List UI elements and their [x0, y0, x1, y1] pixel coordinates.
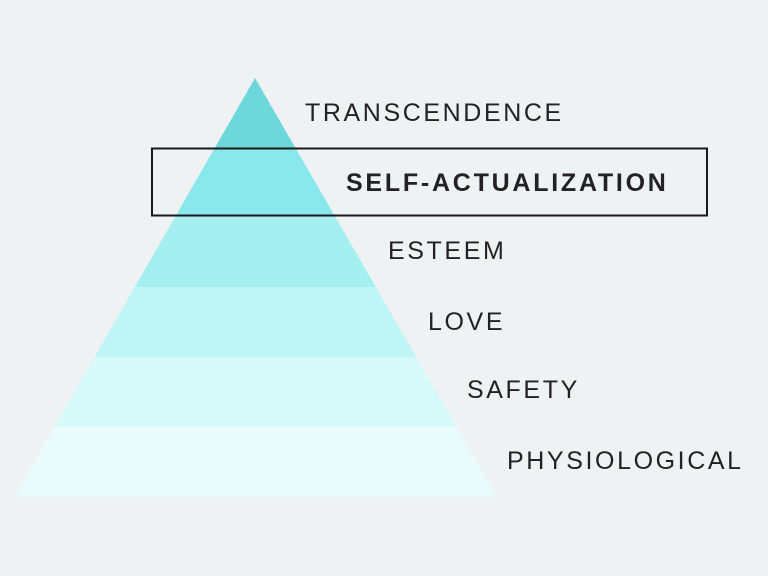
label: esteem: ESTEEM	[388, 237, 506, 265]
band: transcendence	[215, 78, 296, 148]
pyramid	[14, 78, 497, 497]
band: love	[95, 287, 416, 357]
label: love: LOVE	[428, 308, 505, 336]
label: self-actualization: SELF-ACTUALIZATION	[346, 169, 669, 197]
band: self-actualization	[176, 148, 334, 215]
band: safety	[54, 357, 457, 427]
band: physiological	[14, 427, 497, 497]
band: esteem	[135, 215, 376, 287]
highlight box	[152, 148, 707, 216]
label: transcendence: TRANSCENDENCE	[305, 99, 564, 127]
label: safety: SAFETY	[467, 376, 580, 404]
label: physiological: PHYSIOLOGICAL	[507, 447, 744, 475]
